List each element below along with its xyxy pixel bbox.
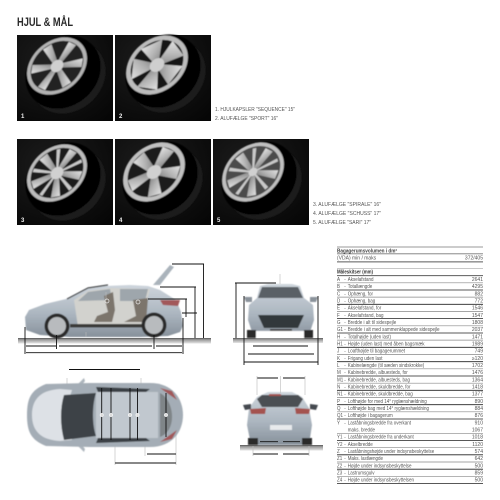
table: dimensions: 1476	[472, 370, 483, 376]
table: dimensions: 1364	[472, 377, 483, 383]
wheel photo 1	[11, 20, 120, 129]
table: dimensions: -	[344, 436, 346, 441]
number 3: 3	[21, 218, 25, 224]
mirrors	[244, 297, 318, 302]
table: dimensions: Z	[337, 449, 340, 455]
table: dimensions: 2037	[472, 327, 483, 333]
ground	[240, 445, 323, 450]
table: dimensions: 1808	[472, 320, 483, 326]
mirrors	[78, 378, 85, 452]
table: dimensions: Y2	[337, 442, 343, 448]
number 4: 4	[119, 218, 123, 224]
table: dimensions: -	[344, 385, 346, 391]
table: dimensions: 1418	[472, 384, 483, 390]
table: dimensions: -	[344, 285, 346, 290]
table: dimensions: Lofthøjde i bagagerum	[348, 413, 393, 419]
table: dimensions: Q	[337, 406, 341, 412]
number plate	[270, 425, 292, 430]
table: dimensions: 890	[475, 399, 483, 405]
table: dimensions: -	[344, 393, 346, 398]
table: luggage volume: Bagagerumsvolumen i dm³	[337, 248, 397, 254]
number 1: 1	[21, 114, 25, 120]
table: dimensions: 500	[475, 478, 483, 484]
captions wheels 1-2: 1. HJULKAPSLER "SEQUENCE" 15"	[215, 107, 295, 113]
table: dimensions: L	[337, 363, 340, 369]
table: dimensions: Højde (uden last) med åben bagsmæk	[348, 340, 425, 348]
table: dimensions: Y1	[337, 434, 343, 441]
table: dimensions: 574	[475, 449, 483, 455]
table: dimensions: -	[344, 378, 346, 384]
table: luggage volume: (VDA) min / maks	[337, 255, 377, 261]
table: dimensions: Y	[337, 420, 341, 427]
title: HJUL & MÅL	[17, 16, 73, 29]
table: dimensions: M	[337, 370, 341, 376]
table: dimensions: Kabinelængde (til sæden sindskrokke)	[348, 363, 425, 369]
table: dimensions: 1546	[472, 306, 483, 312]
table: dimensions: -	[344, 307, 346, 312]
table: dimensions: 2641	[472, 277, 483, 283]
table: dimensions: Bredde i alt med sammenklappede sidespejle	[348, 327, 440, 333]
table: dimensions: ≥120	[472, 356, 483, 362]
table: dimensions: -	[344, 278, 346, 283]
table: dimensions: Frigang uden last	[348, 356, 383, 362]
table: dimensions: Akselafstand, bag	[348, 313, 384, 319]
table: luggage volume: 372/405	[465, 255, 483, 261]
table: dimensions: -	[344, 400, 346, 405]
table: dimensions: Loafthøjde til bagagerummet	[348, 348, 406, 355]
table: dimensions: 642	[475, 456, 483, 462]
table: dimensions: Ophæng, for	[348, 291, 373, 298]
windscreen	[258, 287, 303, 298]
table: dimensions: 859	[475, 470, 483, 476]
captions wheels 1-2: 2. ALUFÆLGE "SPORT" 16"	[215, 116, 278, 122]
front view car with dimensions	[233, 274, 323, 365]
cutaway interior	[74, 288, 150, 327]
table: dimensions: -	[344, 328, 346, 333]
wheel photo 5	[207, 126, 316, 235]
table: dimensions: 1547	[472, 313, 483, 319]
table: dimensions: Laståbningsbredde fra underkant	[348, 433, 414, 441]
table: dimensions: Q1	[337, 413, 343, 419]
table: dimensions: N1	[337, 391, 343, 398]
table: dimensions: Højde under indsynsbeskyttelse	[348, 463, 412, 470]
wheel photo 2	[111, 19, 220, 128]
table: dimensions: Maks. lastlængde	[348, 456, 383, 462]
dimension lines	[25, 264, 204, 354]
table: dimensions: -	[344, 457, 346, 462]
table: dimensions: 910	[475, 420, 483, 426]
table: dimensions: Lofthøjde for med 14° ryglænshældning	[348, 399, 427, 405]
table: dimensions: maks. bredde	[348, 427, 375, 434]
table: dimensions: Z2	[337, 463, 343, 470]
table: dimensions: -	[344, 414, 346, 419]
grille	[258, 315, 304, 328]
table: dimensions: -	[344, 314, 346, 319]
taillight	[160, 300, 180, 306]
table: dimensions: H	[337, 334, 341, 341]
table: dimensions: G	[337, 320, 341, 326]
table: dimensions: 882	[475, 291, 483, 297]
side view car with dimensions	[18, 264, 211, 354]
table: dimensions: 1067	[472, 428, 483, 434]
table: dimensions: 1377	[472, 392, 483, 398]
table: dimensions: -	[344, 292, 346, 298]
table: dimensions: -	[344, 364, 346, 369]
table: dimensions: Totalhøjde (uden last)	[348, 334, 391, 341]
table: dimensions: N	[337, 384, 341, 391]
table: dimensions: -	[344, 464, 346, 470]
table: dimensions: Z3	[337, 470, 343, 477]
rear window	[160, 393, 172, 437]
table: dimensions: H1	[337, 341, 343, 348]
table: dimensions: -	[344, 443, 346, 448]
top width dimension	[69, 368, 140, 370]
table: dimensions: -	[344, 342, 346, 348]
table: dimensions: 772	[475, 298, 483, 304]
dimension lines	[253, 378, 309, 454]
table: dimensions: 749	[475, 349, 483, 355]
captions wheels 3-5: 5. ALUFÆLGE "SARI" 17"	[313, 220, 371, 226]
specifications table	[337, 246, 483, 484]
table: dimensions: Ophæng, bag	[348, 298, 376, 305]
table: dimensions: Lastrumsgulv	[348, 470, 375, 477]
table: dimensions: Lofthøjde bag med 14° ryglænshældning	[348, 406, 429, 412]
wheel photo 3	[11, 127, 120, 236]
table: dimensions: 1989	[472, 342, 483, 348]
table: dimensions: -	[344, 357, 346, 362]
table: dimensions: 884	[475, 406, 483, 412]
table: dimensions: -	[344, 335, 346, 341]
table: dimensions: Kabinebredde, albuesteds, for	[348, 370, 408, 376]
table: dimensions: -	[344, 450, 346, 455]
table: dimensions: -	[344, 299, 346, 305]
table: dimensions: 4295	[472, 284, 483, 290]
table: dimensions: J	[337, 348, 340, 355]
table: dimensions: Måleskitser (mm)	[337, 269, 373, 276]
table: dimensions: -	[344, 421, 346, 427]
table: dimensions	[337, 268, 483, 484]
table: dimensions: E	[337, 305, 340, 312]
table: dimensions: G1	[337, 327, 343, 333]
rear window	[257, 395, 303, 407]
table: dimensions: M1	[337, 377, 344, 384]
captions wheels 3-5: 4. ALUFÆLGE "SCHUSS" 17"	[313, 211, 381, 217]
car body	[25, 285, 183, 337]
table: dimensions: Bredde i alt til sidespejle	[348, 320, 397, 326]
captions wheels 1-2	[215, 107, 295, 122]
table: dimensions: A	[337, 277, 341, 283]
ground	[233, 338, 323, 343]
table: dimensions: -	[344, 471, 346, 477]
number 5: 5	[217, 218, 221, 224]
table: dimensions: Højde under indsynsbeskyttelsen	[348, 477, 414, 484]
top view car with dimensions	[27, 370, 183, 465]
table: dimensions: 1471	[472, 334, 483, 340]
car body top	[27, 383, 183, 447]
table: dimensions: F	[337, 313, 340, 319]
windscreen	[61, 393, 96, 440]
table: dimensions: 876	[475, 413, 483, 419]
car body rear	[247, 392, 312, 445]
table: luggage volume	[337, 246, 483, 262]
captions wheels 3-5	[313, 202, 381, 226]
table: dimensions: -	[344, 479, 346, 484]
table: dimensions: 1018	[472, 435, 483, 441]
table: dimensions: P	[337, 399, 340, 405]
wheels	[44, 314, 70, 338]
table: dimensions: Kabinebredde, skuldbredde, for	[348, 384, 411, 391]
table: dimensions: -	[344, 407, 346, 412]
wheel photo 4	[108, 126, 217, 235]
table: dimensions: -	[344, 321, 346, 326]
dimension lines	[235, 283, 318, 365]
captions wheels 3-5: 3. ALUFÆLGE "SPIRALE" 16"	[313, 202, 381, 208]
side windows	[96, 387, 150, 443]
table: dimensions: C	[337, 291, 341, 298]
table: dimensions: Kabinebredde, skuldbredde, bag	[348, 391, 413, 398]
table: dimensions: 1120	[472, 442, 483, 448]
table: dimensions: Z4	[337, 477, 343, 484]
table: dimensions: D	[337, 298, 341, 305]
width bars	[102, 388, 176, 463]
table: dimensions: Akselafstand	[348, 277, 374, 283]
ground	[18, 338, 211, 344]
table: dimensions: -	[344, 371, 346, 376]
table: dimensions: 1702	[472, 363, 483, 369]
table: dimensions: Totallængde	[348, 284, 373, 290]
table: dimensions: Kabinebredde, albuesteds, bag	[348, 377, 410, 384]
number 2: 2	[119, 114, 123, 120]
lights	[250, 408, 310, 414]
table: dimensions: Akselafstand, for	[348, 305, 382, 312]
table: dimensions: B	[337, 284, 340, 290]
car body front	[248, 284, 314, 338]
open tailgate	[153, 265, 174, 285]
rear view car with dimensions	[240, 376, 323, 456]
mirrors	[243, 404, 318, 410]
roof line	[67, 285, 108, 299]
table: dimensions: -	[344, 350, 346, 355]
table: dimensions: Laståbningshøjde under indsynsbeskyttelse	[348, 448, 435, 455]
table: dimensions: 500	[475, 463, 483, 469]
table: dimensions: K	[337, 356, 341, 362]
table: dimensions: Laståbningsbredde fra overkant	[348, 419, 412, 427]
table: dimensions: Z1	[337, 456, 343, 462]
table: dimensions: Akselbredde	[348, 442, 373, 448]
